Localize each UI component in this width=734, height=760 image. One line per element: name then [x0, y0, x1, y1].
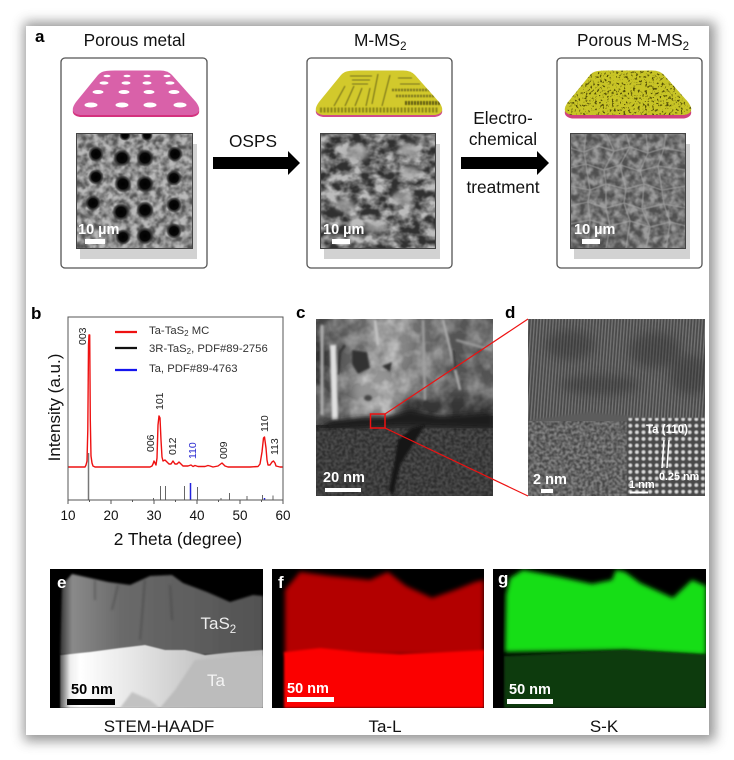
tick labels: 40 [189, 508, 205, 523]
scale bar [85, 239, 105, 244]
peak labels: 012 [167, 437, 179, 455]
peak labels: 003 [77, 327, 89, 345]
legend: Ta-TaS [149, 325, 184, 337]
peak labels: 110 [187, 442, 199, 459]
scale label: 50 nm [71, 682, 113, 698]
legend: MC [189, 325, 209, 337]
panel d: HRTEM image [505, 303, 710, 496]
inset lattice [627, 418, 705, 496]
panel f: Ta-L map [272, 569, 484, 736]
box: porous M-MS2 [557, 58, 702, 268]
panel g: S-K map [493, 569, 706, 736]
tick labels: 10 [60, 508, 76, 523]
peak labels [77, 327, 281, 459]
SEM image: M-MS2 [320, 133, 436, 249]
scale label: 20 nm [323, 470, 365, 486]
scale bar [67, 699, 115, 705]
scale label: 50 nm [287, 681, 329, 697]
y axis title: Intensity (a.u.) [45, 354, 64, 461]
box: M-MS2 [307, 58, 452, 268]
panel a: synthesis scheme [35, 27, 702, 268]
heading: porous metal: Porous metal [84, 30, 185, 50]
label: electro-chemical treatment: treatment [466, 177, 540, 197]
scale bar [541, 489, 553, 493]
inset labels [629, 424, 699, 494]
label a: a [35, 27, 45, 46]
label d: d [505, 303, 515, 322]
zoom connector lines [385, 319, 528, 496]
SEM image: porous metal [76, 129, 193, 250]
panel e: STEM-HAADF [50, 569, 263, 736]
x axis title: 2 Theta (degree) [114, 529, 242, 549]
legend: 2 [187, 347, 192, 356]
SEM shadow [80, 144, 197, 259]
heading: porous M-MS2: 2 [683, 41, 689, 53]
scale label: 50 nm [509, 682, 551, 698]
tick labels [60, 508, 291, 523]
scale bar [325, 488, 361, 492]
scale label: 10 µm [78, 222, 119, 238]
label e: e [57, 573, 66, 592]
tick labels: 20 [103, 508, 119, 523]
label TaS2: 2 [230, 624, 236, 636]
inset labels: 0.25 nm [659, 471, 699, 483]
SEM image: porous M-MS2 [570, 133, 686, 249]
selection box [370, 414, 385, 428]
legend: Ta, PDF#89-4763 [149, 363, 238, 375]
scale bar [332, 239, 350, 244]
inset labels: 1 nm [629, 479, 655, 491]
SEM shadow [324, 144, 440, 259]
box: porous metal [61, 58, 207, 268]
arrow: OSPS [213, 131, 300, 175]
peak labels: 113 [269, 438, 281, 455]
tick labels: 50 [232, 508, 248, 523]
caption: STEM-HAADF [104, 717, 214, 736]
caption: S-K [590, 717, 619, 736]
label OSPS: OSPS [229, 131, 277, 151]
red XRD curve [68, 335, 283, 467]
peak labels: 101 [154, 392, 166, 410]
heading: porous M-MS2: Porous M-MS [577, 30, 683, 50]
SEM shadow [574, 144, 690, 259]
peak labels: 110 [259, 415, 271, 432]
label c: c [296, 303, 305, 322]
label b: b [31, 304, 41, 323]
scale bar [287, 697, 334, 702]
legend [115, 325, 268, 375]
label: electro-chemical treatment: chemical [469, 129, 537, 149]
heading: M-MS2: 2 [400, 41, 406, 53]
caption: Ta-L [368, 717, 402, 736]
label f: f [278, 573, 284, 592]
reference ticks [88, 453, 273, 500]
scale label: 10 µm [323, 222, 364, 238]
inset labels: Ta (110) [646, 424, 688, 436]
legend: 3R-TaS [149, 343, 187, 355]
label Ta: Ta [207, 671, 226, 690]
label TaS2: TaS [200, 614, 230, 633]
tick labels: 30 [146, 508, 162, 523]
S map [493, 569, 706, 708]
icon: M-MS2 plate [315, 70, 443, 117]
icon: porous M-MS2 plate [564, 70, 692, 118]
panel c: TEM image [296, 303, 493, 497]
TEM micrograph [314, 319, 493, 497]
peak labels: 009 [218, 441, 230, 459]
tick labels: 60 [275, 508, 291, 523]
axes frame [68, 317, 283, 500]
label: electro-chemical treatment: Electro- [473, 108, 533, 128]
icon: porous metal plate [73, 70, 199, 117]
legend: 2 [184, 329, 189, 338]
legend: , PDF#89-2756 [191, 343, 268, 355]
STEM image [50, 569, 263, 708]
scale bar [582, 239, 600, 244]
peak labels: 006 [145, 434, 157, 452]
panel b: XRD chart [31, 304, 291, 549]
scale label: 2 nm [533, 472, 567, 488]
label g: g [498, 569, 508, 588]
axis ticks [68, 500, 283, 504]
heading: M-MS2: M-MS [354, 30, 400, 50]
HRTEM micrograph [528, 319, 710, 496]
arrow: electrochemical treatment [461, 108, 549, 197]
scale label: 10 µm [574, 222, 615, 238]
scale bar [507, 699, 553, 704]
Ta map [272, 569, 484, 708]
